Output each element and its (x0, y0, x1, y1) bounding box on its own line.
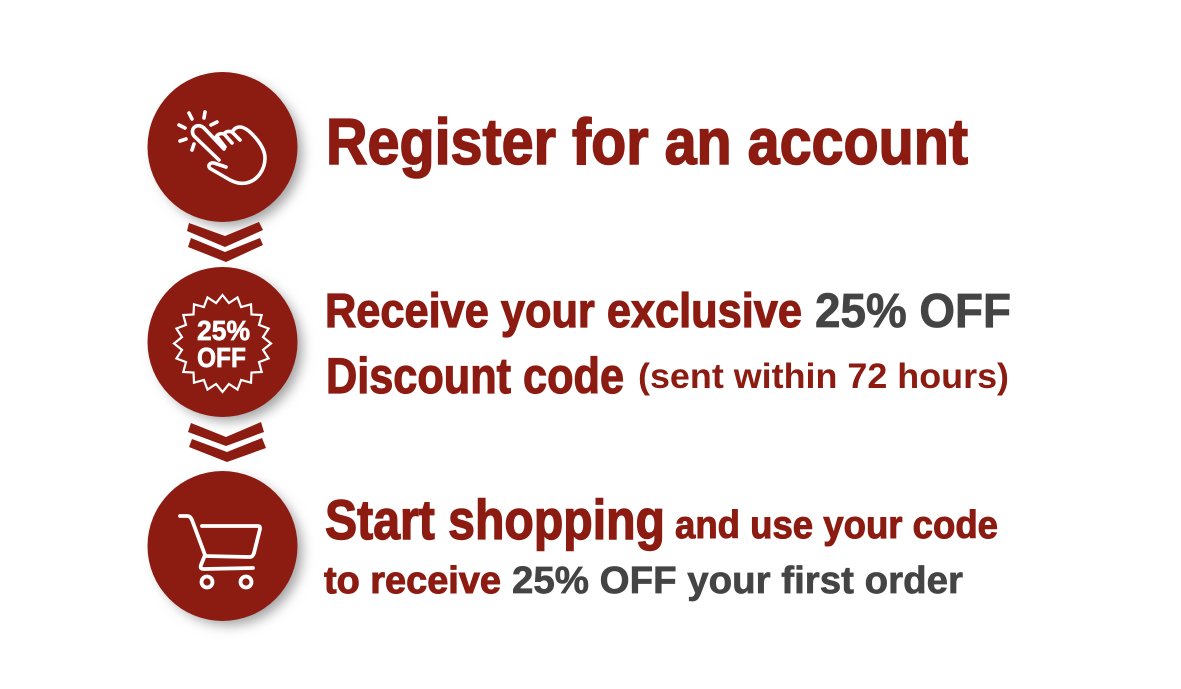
step 1 circle (148, 72, 302, 226)
step 2 circle (148, 267, 302, 421)
heading: first order offer (324, 560, 963, 602)
step 2: discount code (148, 267, 1011, 421)
heading: discount code: (sent within 72 hours) (638, 357, 1009, 396)
badge text (197, 315, 250, 373)
heading: first order offer: 25% OFF your first order (512, 560, 963, 602)
step 3 circle (148, 471, 302, 625)
arrow: chevrons 2 (188, 422, 266, 462)
heading: start shopping (325, 488, 998, 551)
icon: pointing hand (179, 112, 265, 183)
heading: start shopping: Start shopping (325, 488, 665, 551)
badge text: 25% (197, 315, 250, 346)
heading: receive offer: 25% OFF (815, 285, 1011, 338)
heading: discount code: Discount code (326, 348, 624, 404)
step 3: start shopping (148, 471, 998, 625)
icon: 25% off badge (174, 295, 271, 392)
step 1: register (148, 72, 968, 226)
heading: start shopping: and use your code (675, 504, 998, 547)
heading: discount code (326, 348, 1009, 404)
arrow: chevrons 1 (187, 222, 263, 262)
heading: first order offer: to receive (324, 560, 501, 602)
heading: receive offer: Receive your exclusive (325, 285, 802, 338)
badge text: OFF (197, 342, 246, 373)
heading: register: Register for an account (326, 105, 968, 178)
icon: shopping cart (180, 516, 260, 588)
